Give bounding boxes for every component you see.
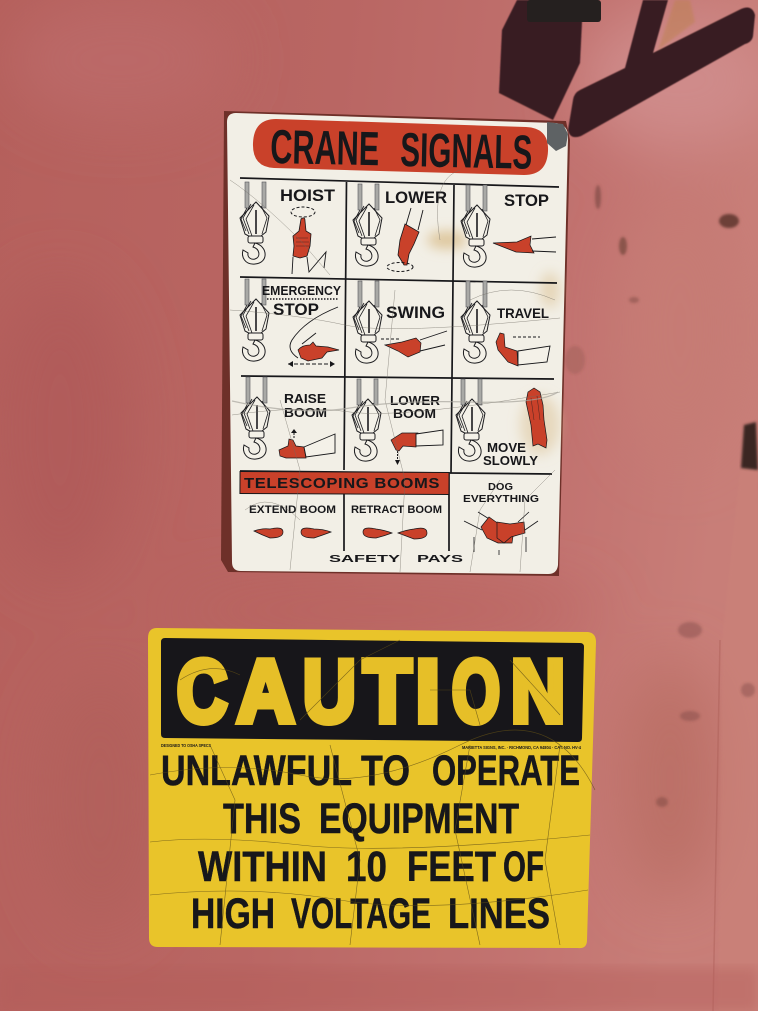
aged stains [427,231,560,455]
signal: dog everything: EVERYTHING [463,493,539,505]
bracket clamp at top [527,0,601,22]
warning line 4: LINES [448,890,550,938]
warning line 1: OPERATE [432,747,580,795]
warning line 3 [198,843,544,891]
signal: emergency stop: EMERGENCY [262,284,342,298]
icon: pulley hook 4 [240,279,269,361]
paint cracks on yellow sign [150,640,595,945]
signal: lower: LOWER [385,188,447,207]
icon: pulley hook 5 [353,281,382,363]
black caution band: T [364,642,411,741]
sign rust edge [221,111,570,576]
signal: retract boom: RETRACT BOOM [351,504,442,516]
warning line 3: 10 [346,843,387,891]
icon: pulley hook 6 [461,281,490,363]
footer: safety pays: PAYS [417,553,463,565]
icon: pulley hook 2 [353,184,382,266]
title banner: SIGNALS [400,124,533,180]
icon: pulley hook 3 [461,185,490,267]
signal: lower [385,188,447,272]
heading: telescoping booms banner [240,471,449,495]
signal: extend boom: EXTEND BOOM [249,504,336,516]
panel: crane signals sign [221,111,570,576]
signal: move slowly: SLOWLY [483,454,539,468]
black caution band: I [416,642,440,740]
signal: raise boom: RAISE [284,391,326,406]
signal: extend boom [249,504,336,538]
warning line 2: EQUIPMENT [319,795,519,843]
signal: move slowly [483,388,547,468]
warning line 3: WITHIN [198,843,327,891]
signal: emergency stop [262,284,342,367]
signal: travel: TRAVEL [497,305,549,321]
signal: swing: SWING [386,303,445,322]
corner tape [547,122,568,151]
signal: stop [493,191,556,253]
icon: pulley hook 8 [352,379,381,461]
signal: dog everything [463,481,539,555]
black caution band: C [177,642,227,740]
panel: caution sign [148,628,596,948]
orange stain on wall [658,0,695,50]
sign yellow board [148,628,596,948]
warning line 1 [161,747,580,795]
title banner [253,119,548,180]
signal: dog everything: DOG [488,481,513,493]
signal: travel [496,305,550,366]
warning line 4 [191,890,550,938]
shadow of bracket on wall [499,0,755,137]
black caution band [161,638,584,742]
heading: telescoping booms banner: TELESCOPING BOOMS [244,476,440,492]
sign white board [227,113,568,574]
warning line 1: TO [361,747,410,795]
warning line 2 [223,795,519,843]
signal: retract boom [351,504,442,539]
signal: lower boom [390,393,443,465]
footer: safety pays [329,553,463,565]
warning line 1: UNLAWFUL [161,747,352,795]
signal: move slowly: MOVE [487,441,526,455]
warning line 3: FEET [407,843,496,891]
signal: raise boom [279,391,335,458]
icon: pulley hook 1 [240,182,269,264]
paint cracks on white sign [230,170,560,572]
warning line 3: OF [503,843,544,891]
signal: hoist: HOIST [280,186,336,205]
title banner: CRANE [270,121,380,176]
warning line 2: THIS [223,795,301,843]
signal: swing [381,303,447,357]
signal: lower boom: BOOM [393,406,436,421]
small print left: DESIGNED TO OSHA SPECS [161,743,211,748]
signal: lower boom: LOWER [390,393,441,408]
signal: hoist [280,186,336,274]
footer: safety pays: SAFETY [329,553,400,565]
black caution band: O [452,643,500,741]
black caution band: N [511,643,565,741]
icon: pulley hook 7 [241,377,270,459]
black caution band: A [237,642,294,740]
icon: pulley hook 9 [456,379,485,461]
signal: raise boom: BOOM [284,405,327,420]
signal: emergency stop: STOP [273,300,319,319]
small print right: MARIETTA SIGNS, INC. · RICHMOND, CA 94804 · CAT. NO. HV-4 [462,745,581,750]
signal: stop: STOP [504,191,549,210]
warning line 4: VOLTAGE [291,890,431,938]
black caution band: U [303,643,356,741]
signal grid lines [240,178,559,551]
warning line 4: HIGH [191,890,275,938]
